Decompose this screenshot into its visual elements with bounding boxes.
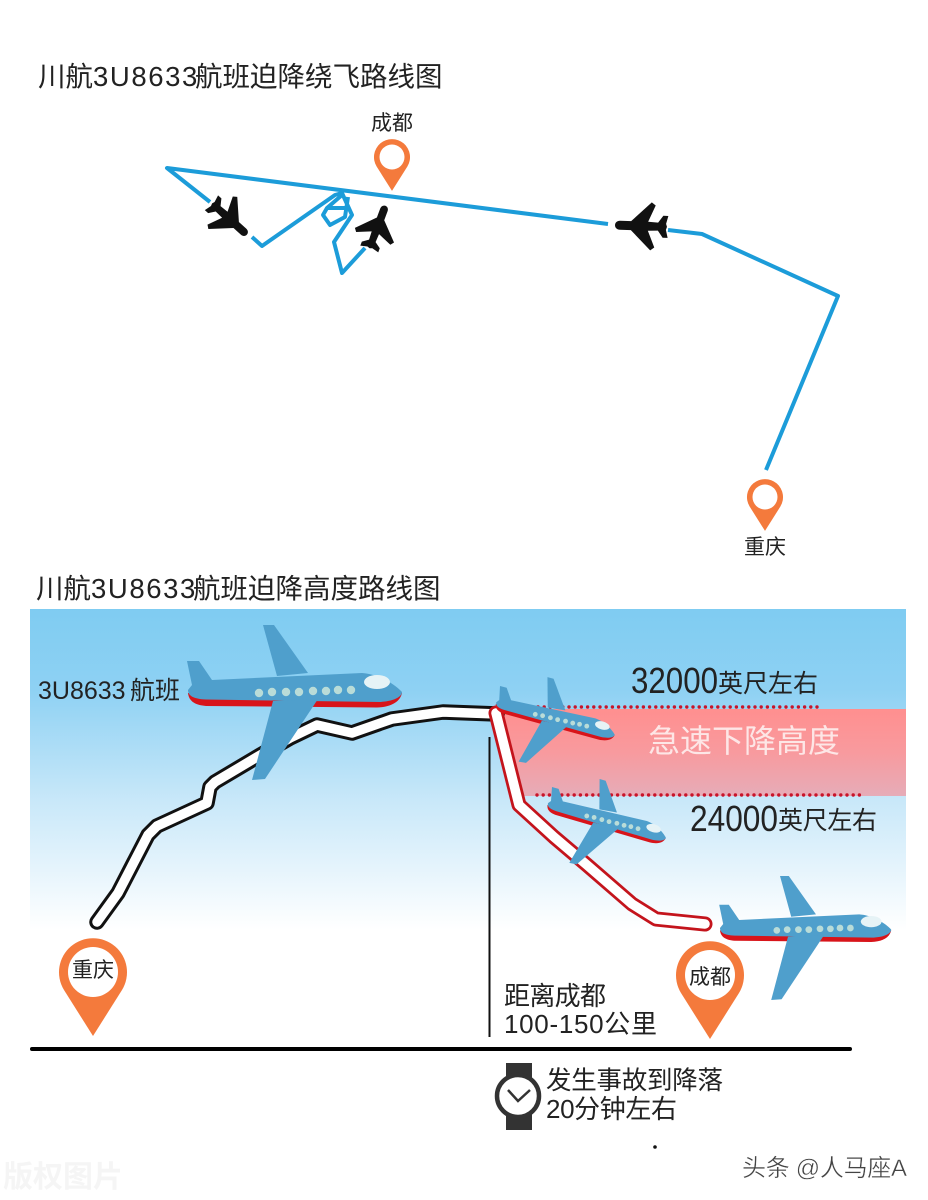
flight route line [167, 168, 838, 470]
title: detour route map: 3U8633 [93, 61, 199, 92]
label: distance from Chengdu: 100-150公里 [504, 1009, 657, 1039]
climb route white line [97, 712, 497, 922]
location pin: Chongqing: 重庆 [744, 536, 786, 559]
label: 24000 feet: 24000 [690, 798, 778, 839]
label: 24000 feet: 英尺左右 [778, 807, 877, 835]
icon: plane near Chengdu right [350, 199, 405, 256]
title: altitude route map: 川航 [36, 573, 91, 604]
dotted line: 32000 ft [538, 705, 822, 709]
label: 24000 feet [690, 798, 877, 839]
label: 32000 feet: 英尺左右 [718, 670, 818, 698]
label: flight number: 3U8633 [38, 677, 126, 705]
plane: start of descent [483, 666, 625, 784]
panel: detour route map [167, 112, 838, 559]
label: flight number: 航班 [130, 677, 180, 705]
plane: cruising flight [187, 625, 402, 780]
title: altitude route map: 航班迫降高度路线图 [193, 573, 440, 604]
sky background [30, 609, 906, 930]
ground line [30, 1047, 852, 1051]
location pin: Chongqing: 重庆 [72, 959, 114, 982]
icon: plane on route [614, 201, 669, 251]
location pin: Chengdu [676, 941, 744, 1039]
watermark: Toutiao author: 头条 @人马座A [742, 1155, 907, 1182]
label: 32000 feet [631, 660, 818, 701]
label: time from incident to landing [546, 1067, 723, 1124]
watermark: copyright image: 版权图片 [3, 1161, 123, 1194]
title: detour route map: 航班迫降绕飞路线图 [195, 61, 442, 92]
descent route red line [496, 713, 705, 924]
title: altitude route map: 3U8633 [91, 573, 197, 604]
icon: watch [497, 1063, 539, 1130]
label: time from incident to landing: 20分钟左右 [546, 1094, 677, 1124]
label: rapid descent: 急速下降高度 [648, 723, 840, 759]
dotted line: 24000 ft [537, 793, 865, 797]
location pin: Chongqing [59, 938, 127, 1036]
dot [653, 1145, 657, 1149]
title: detour route map: 川航 [38, 61, 93, 92]
label: distance from Chengdu [504, 981, 657, 1039]
location pin: Chongqing [744, 479, 786, 559]
location pin: Chengdu: 成都 [689, 966, 731, 989]
rapid descent band [497, 709, 906, 796]
plane: end of descent [533, 767, 676, 886]
label: 32000 feet: 32000 [631, 660, 718, 701]
label: time from incident to landing: 发生事故到降落 [546, 1067, 723, 1095]
label: distance from Chengdu: 距离成都 [504, 981, 606, 1011]
plane: landing [719, 876, 891, 1000]
location pin: Chengdu: 成都 [371, 112, 413, 135]
distance marker line [488, 737, 490, 1037]
icon: plane near Chengdu left [197, 187, 261, 251]
location pin: Chengdu [371, 112, 413, 191]
panel: altitude chart [30, 609, 906, 1051]
